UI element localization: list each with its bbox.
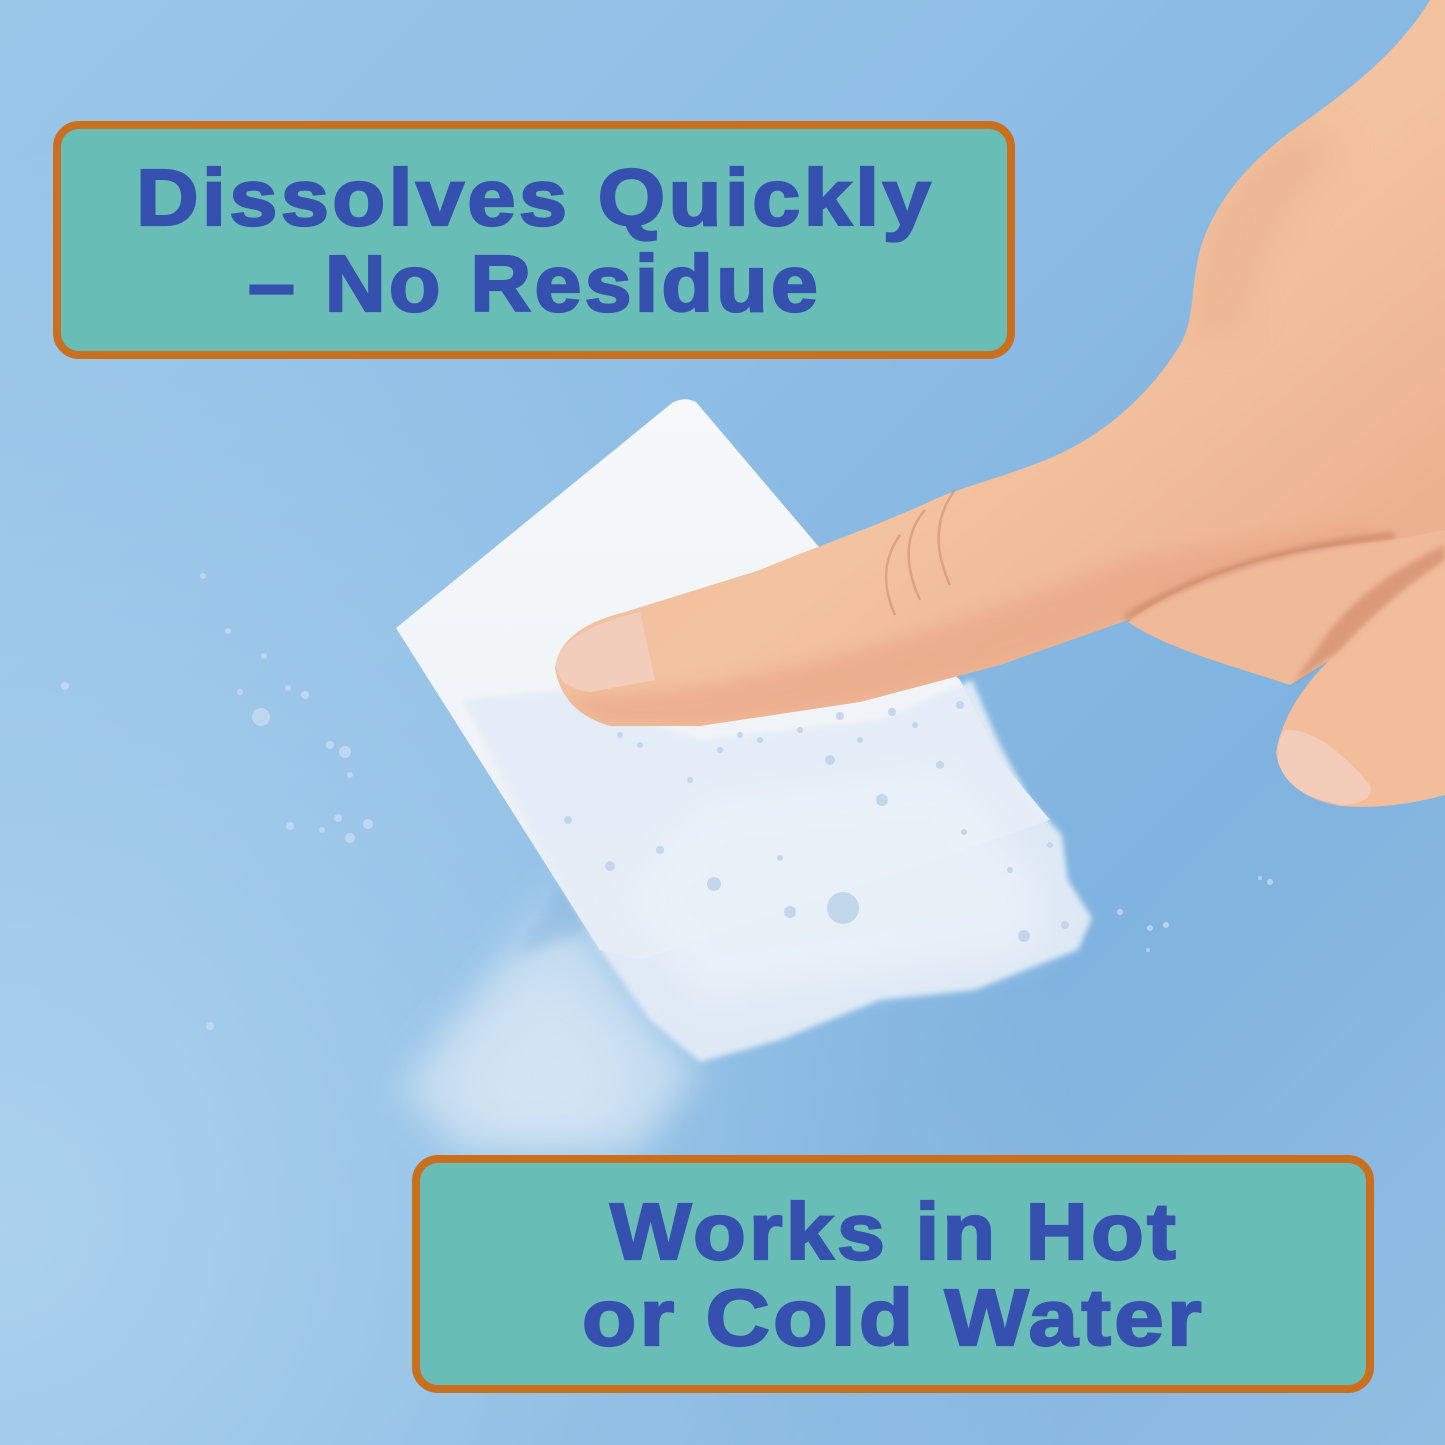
foam bubbles — [564, 701, 1069, 942]
lower index finger shading — [574, 534, 1349, 726]
thumb and curled finger — [1276, 560, 1445, 807]
knuckle shading — [1200, 142, 1318, 322]
foamy lower sheet — [462, 680, 1092, 1062]
heading line one: Works in Hot — [610, 1187, 1179, 1276]
index fingernail — [556, 612, 655, 692]
knuckle creases — [886, 490, 955, 615]
shading clipped to the hand — [565, 125, 1400, 726]
callout: hot or cold water — [416, 1159, 1370, 1389]
heading line two: or Cold Water — [582, 1273, 1205, 1362]
hand — [555, 0, 1445, 807]
dissolving sheet — [396, 399, 1092, 1062]
heading line two: – No Residue — [248, 239, 821, 328]
finger gap shadow — [1125, 535, 1395, 618]
water droplets — [61, 573, 1273, 1030]
thumb nail — [1278, 730, 1371, 805]
palm and index finger — [555, 0, 1445, 726]
solid upper sheet — [396, 399, 1050, 960]
callout: dissolves quickly — [57, 125, 1011, 355]
knuckle crease shadow — [1292, 545, 1445, 685]
middle finger — [1128, 530, 1445, 700]
foam trail fading below the sheet — [400, 880, 700, 1150]
heading line one: Dissolves Quickly — [136, 153, 934, 242]
